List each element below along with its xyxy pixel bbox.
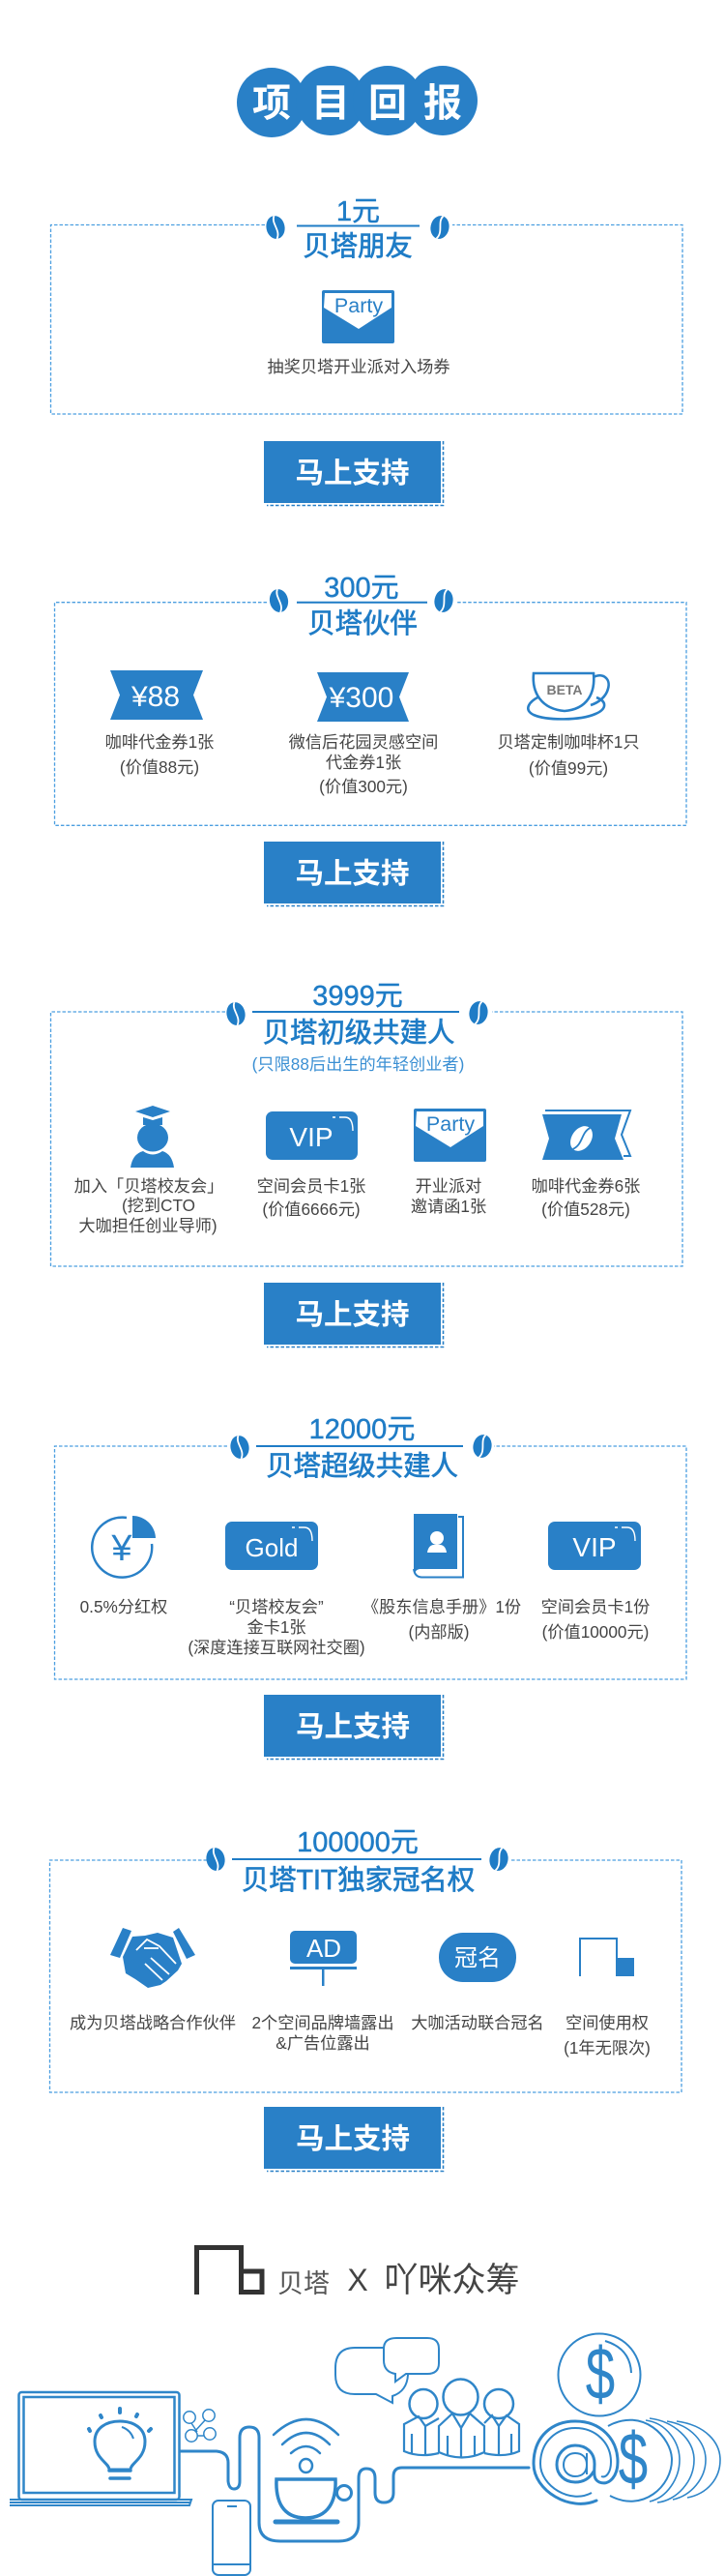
icon: gold card: Gold <box>246 1533 298 1562</box>
panel: 300元 贝塔伙伴 <box>54 573 686 825</box>
button: 马上支持: 马上支持 <box>295 458 410 489</box>
icon: coin stack: $ <box>619 2418 648 2501</box>
text: space use: (1年无限次) <box>564 2038 651 2058</box>
text: dividend: 0.5%分红权 <box>80 1597 167 1616</box>
text: handbook: (内部版) <box>408 1622 470 1642</box>
footer logos: 贝塔 × 吖咪众筹: X <box>347 2263 368 2297</box>
icon: network nodes <box>184 2410 216 2442</box>
icon: gold card <box>225 1522 318 1570</box>
button: 马上支持 <box>264 441 443 505</box>
tier heading: 12000元 <box>228 1414 494 1482</box>
icon: 300 voucher <box>317 672 409 722</box>
footer logos: 贝塔 × 吖咪众筹: 贝塔 <box>277 2269 330 2298</box>
text: member card <box>257 1176 365 1219</box>
text: alumni gold card: (深度连接互联网社交圈) <box>188 1638 365 1657</box>
icon: shareholder handbook <box>414 1514 463 1577</box>
reward text: 抽奖贝塔开业派对入场券 <box>267 357 450 376</box>
button: 马上支持: 马上支持 <box>295 858 410 890</box>
icon: space logo <box>580 1939 634 1976</box>
text: coffee coupons: (价值528元) <box>541 1199 630 1219</box>
tier heading: 1元: 1元 <box>336 196 380 227</box>
tier heading: 100000元: 贝塔TIT独家冠名权 <box>242 1865 475 1896</box>
text: party invitation <box>411 1176 486 1216</box>
tier heading: 300元: 300元 <box>324 573 399 604</box>
tier heading: 12000元: 贝塔超级共建人 <box>266 1451 458 1482</box>
icon: 88 voucher: ¥88 <box>130 681 180 713</box>
button: 马上支持: 马上支持 <box>295 1299 410 1331</box>
icon: 88 voucher <box>110 670 203 720</box>
icon: VIP card <box>266 1111 358 1160</box>
icon: AD board: AD <box>306 1934 341 1963</box>
title: 项目回报: 报 <box>423 82 462 125</box>
panel: 3999元 贝塔初级共建人 <box>50 981 682 1266</box>
text: custom cup: 贝塔定制咖啡杯1只 <box>497 732 640 752</box>
text: alumni gold card: “贝塔校友会” <box>229 1597 324 1616</box>
text: co-naming: 大咖活动联合冠名 <box>411 2013 544 2032</box>
text: alumni club: (挖到CTO <box>122 1196 195 1215</box>
text: wechat garden voucher: (价值300元) <box>319 777 408 796</box>
icon: at sign <box>534 2421 618 2503</box>
button: 马上支持 <box>264 1695 443 1759</box>
button: 马上支持: 马上支持 <box>296 2123 410 2155</box>
text: coffee voucher: 咖啡代金券1张 <box>105 732 214 752</box>
icon: AD board <box>290 1931 357 1986</box>
icon: naming badge <box>439 1933 516 1982</box>
icon: team of people <box>404 2380 519 2458</box>
button: 马上支持 <box>264 842 443 905</box>
text: space use: 空间使用权 <box>566 2013 649 2032</box>
connecting pipe <box>180 2427 529 2541</box>
text: coffee coupons <box>532 1176 640 1219</box>
text: handbook: 《股东信息手册》1份 <box>362 1597 521 1616</box>
text: alumni club: 加入「贝塔校友会」 <box>74 1176 223 1196</box>
icon: dividend pie: ¥ <box>110 1528 132 1569</box>
text: coffee voucher <box>105 732 214 777</box>
text: alumni gold card <box>188 1597 365 1657</box>
text: brand wall <box>251 2013 394 2053</box>
text: handbook <box>362 1597 521 1642</box>
tier heading: 12000元: 12000元 <box>309 1414 415 1445</box>
text: member card: (价值10000元) <box>542 1622 649 1642</box>
icon: BETA cup: BETA <box>546 682 583 697</box>
text: party invitation: 开业派对 <box>416 1176 481 1196</box>
icon: party envelope <box>322 290 394 343</box>
icon: graduate <box>130 1106 174 1168</box>
icon: dollar coin <box>559 2333 640 2416</box>
footer logos: 贝塔 × 吖咪众筹: 吖咪众筹 <box>384 2262 520 2299</box>
icon: party envelope <box>414 1109 486 1162</box>
button: 马上支持: 马上支持 <box>296 1711 410 1743</box>
icon: handshake <box>110 1928 195 1988</box>
text: alumni club: 大咖担任创业导师) <box>78 1216 218 1235</box>
icon: VIP card: VIP <box>289 1122 334 1152</box>
icon: coffee with wifi <box>274 2419 352 2522</box>
text: coffee voucher: (价值88元) <box>120 757 199 777</box>
panel: 12000元 贝塔超级共建人 <box>54 1414 686 1679</box>
tier heading: 300元 <box>268 573 455 639</box>
tier heading: 100000元: 100000元 <box>297 1827 419 1858</box>
icon: party envelope: Party <box>334 294 383 317</box>
icon: coin stack <box>608 2418 720 2502</box>
text: wechat garden voucher: 微信后花园灵感空间 <box>289 732 438 752</box>
tier heading: 3999元 <box>224 981 490 1074</box>
text: member card: 空间会员卡1张 <box>257 1176 365 1196</box>
tier heading: 3999元: 贝塔初级共建人 <box>263 1018 454 1049</box>
panel: 1元 贝塔朋友 <box>50 196 682 414</box>
panel: 100000元 贝塔TIT独家冠名权 <box>50 1827 682 2092</box>
icon: dividend pie <box>92 1516 156 1578</box>
text: coffee coupons: 咖啡代金券6张 <box>532 1176 640 1196</box>
illustration: connected coworking <box>10 2333 720 2575</box>
tier heading: 1元: 贝塔朋友 <box>303 231 413 262</box>
icon: laptop with bulb <box>10 2392 191 2505</box>
text: custom cup <box>497 732 640 778</box>
icon: BETA cup <box>528 673 609 719</box>
text: alumni gold card: 金卡1张 <box>246 1617 306 1637</box>
text: strategic partner: 成为贝塔战略合作伙伴 <box>70 2013 236 2032</box>
tier heading: 3999元: (只限88后出生的年轻创业者) <box>252 1054 464 1074</box>
icon: 300 voucher: ¥300 <box>329 682 393 714</box>
text: member card: (价值6666元) <box>262 1199 361 1219</box>
footer logos: 贝塔 × 吖咪众筹 <box>197 2248 520 2299</box>
text: member card: 空间会员卡1份 <box>541 1597 650 1616</box>
icon: party envelope: Party <box>426 1112 475 1136</box>
tier heading: 1元 <box>264 196 451 262</box>
tier heading: 300元: 贝塔伙伴 <box>307 608 418 639</box>
text: wechat garden voucher: 代金券1张 <box>326 753 401 772</box>
text: brand wall: 2个空间品牌墙露出 <box>251 2013 394 2032</box>
text: party invitation: 邀请函1张 <box>411 1197 486 1216</box>
icon: coffee coupon <box>542 1110 630 1160</box>
title: 项目回报: 回 <box>368 82 407 125</box>
title: 项目回报 <box>237 66 478 137</box>
button: 马上支持 <box>264 1283 443 1347</box>
icon: VIP card <box>548 1522 641 1570</box>
title: 项目回报: 项 <box>252 82 291 125</box>
icon: phone <box>213 2501 250 2575</box>
text: alumni club <box>74 1176 223 1235</box>
icon: dollar coin: $ <box>586 2333 615 2415</box>
text: wechat garden voucher <box>289 732 438 796</box>
text: custom cup: (价值99元) <box>529 758 608 778</box>
icon: VIP card: VIP <box>572 1532 617 1562</box>
tier heading: 3999元: 3999元 <box>312 981 403 1012</box>
tier heading: 100000元 <box>204 1827 510 1896</box>
text: brand wall: &广告位露出 <box>276 2033 370 2053</box>
icon: naming badge: 冠名 <box>454 1945 501 1971</box>
button: 马上支持 <box>264 2107 443 2171</box>
title: 项目回报: 目 <box>311 82 350 125</box>
text: space use <box>564 2013 651 2058</box>
text: member card <box>541 1597 650 1642</box>
icon: speech bubbles <box>335 2338 439 2403</box>
